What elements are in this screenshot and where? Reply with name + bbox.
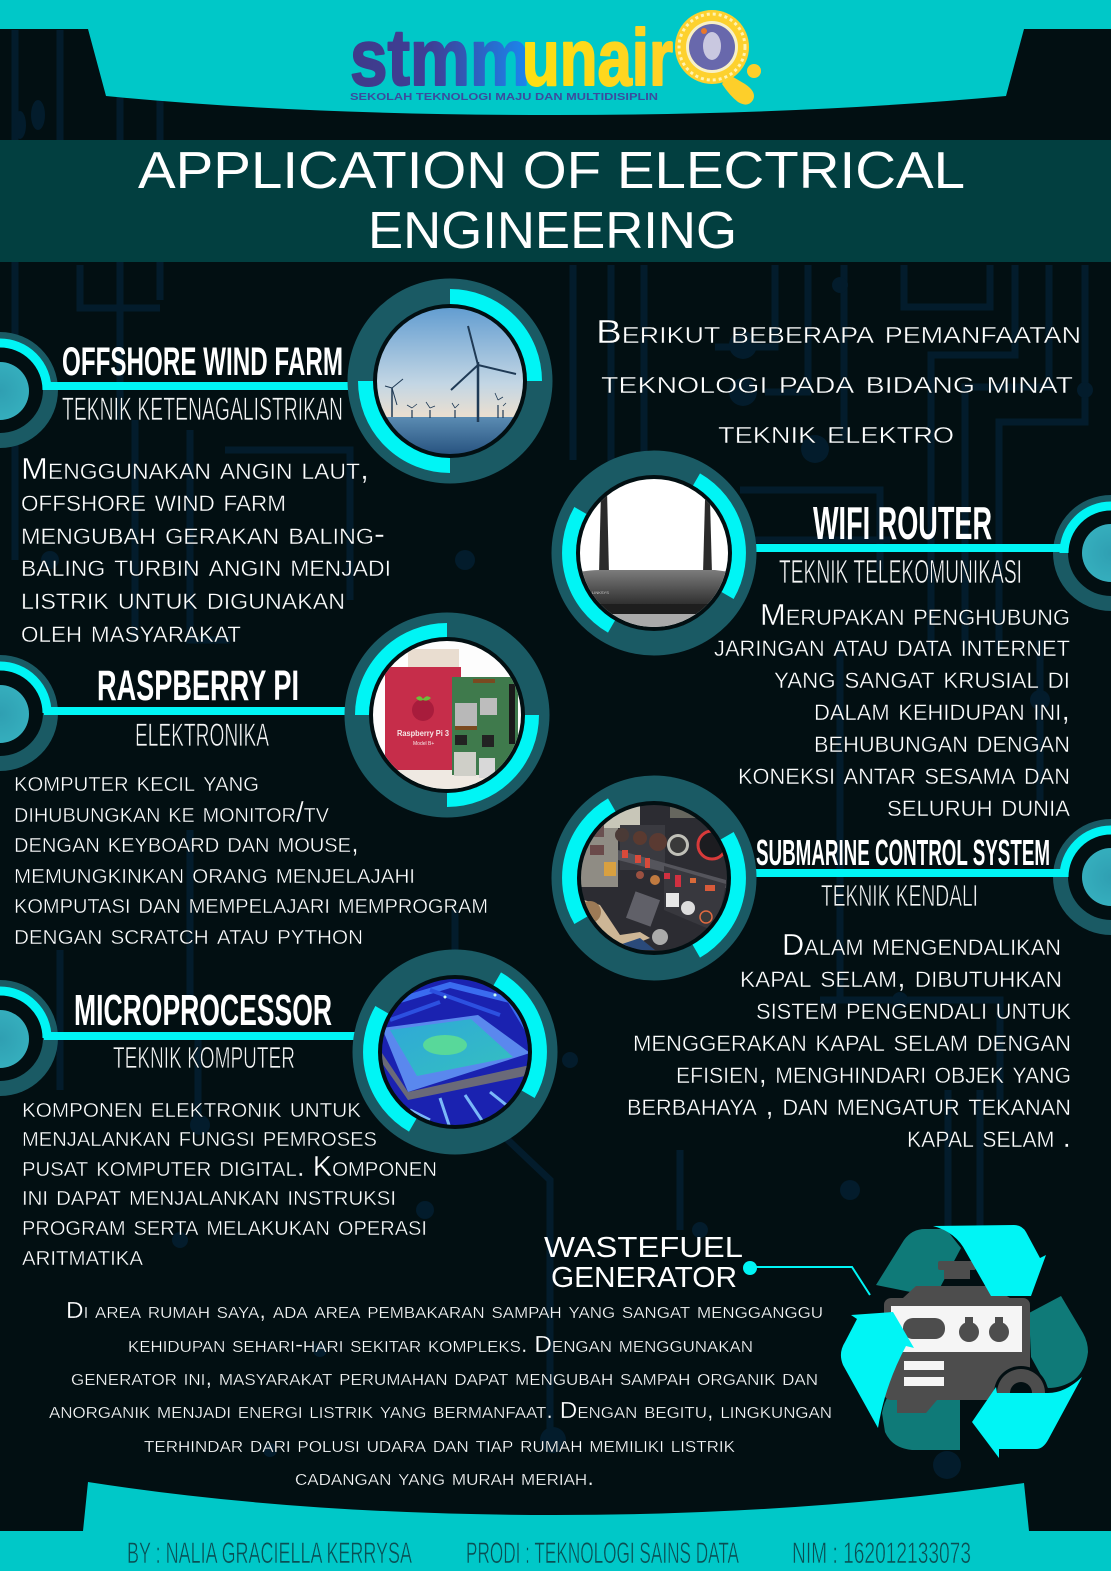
connector node left — [0, 332, 58, 448]
description: dengan scratch atau python — [14, 919, 363, 951]
callout pointer — [743, 1261, 870, 1295]
connector line — [745, 869, 1065, 877]
header banner — [0, 0, 1111, 115]
panel: submarine control system — [552, 776, 1111, 1154]
description: pusat komputer digital. Komponen — [22, 1151, 437, 1183]
heading: WIFI ROUTER — [813, 497, 992, 549]
logo tagline: SEKOLAH TEKNOLOGI MAJU DAN MULTIDISIPLIN — [350, 92, 658, 103]
logo wordmark — [350, 13, 673, 102]
description: listrik untuk digunakan — [21, 581, 345, 616]
panel: raspberry pi — [0, 612, 550, 951]
footer credits — [127, 1537, 971, 1570]
subheading: ELEKTRONIKA — [135, 717, 269, 753]
description: memungkinkan orang menjelajahi — [14, 858, 415, 890]
description: yang sangat krusial di — [774, 660, 1070, 695]
description: efisien, menghindari objek yang — [676, 1055, 1071, 1090]
description: cadangan yang murah meriah. — [295, 1464, 594, 1490]
description: kapal selam . — [907, 1119, 1071, 1154]
description: dihubungkan ke monitor/tv — [14, 797, 330, 829]
description — [14, 766, 488, 951]
title — [138, 142, 965, 260]
description: seluruh dunia — [887, 788, 1070, 823]
description: berbahaya , dan mengatur tekanan — [627, 1087, 1071, 1122]
logo wordmark: unair — [522, 13, 673, 102]
description — [21, 451, 391, 649]
logo seal and magnifier handle — [675, 10, 761, 105]
connector line — [44, 707, 360, 715]
heading: RASPBERRY PI — [97, 662, 299, 710]
description: Merupakan penghubung — [760, 597, 1070, 632]
photo ring: raspberry pi — [344, 612, 550, 818]
description: generator ini, masyarakat perumahan dapat mengubah sampah organik dan — [71, 1364, 818, 1390]
description: program serta melakukan operasi — [22, 1210, 427, 1242]
description: oleh masyarakat — [21, 614, 241, 649]
description: jaringan atau data internet — [714, 628, 1070, 663]
connector node left — [0, 980, 58, 1096]
panel: wastefuel generator — [49, 1225, 1088, 1490]
description: kapal selam, dibutuhkan — [740, 959, 1062, 994]
footer credits: BY : NALIA GRACIELLA KERRYSA — [127, 1537, 412, 1570]
description: komputasi dan mempelajari memprogram — [14, 888, 488, 920]
intro text — [596, 313, 1081, 450]
photo ring: router: LINKSYS — [592, 590, 609, 595]
description: menggerakan kapal selam dengan — [633, 1023, 1071, 1058]
title: APPLICATION OF ELECTRICAL — [138, 142, 965, 200]
subheading: TEKNIK KETENAGALISTRIKAN — [62, 391, 343, 427]
description: sistem pengendali untuk — [756, 991, 1071, 1026]
footer credits: PRODI : TEKNOLOGI SAINS DATA — [466, 1537, 739, 1570]
logo wordmark: stmm — [350, 13, 530, 102]
footer credits: NIM : 162012133073 — [792, 1537, 971, 1570]
description: dalam kehidupan ini, — [814, 692, 1070, 727]
heading — [544, 1232, 743, 1294]
description: menjalankan fungsi pemroses — [22, 1121, 377, 1153]
description — [714, 597, 1070, 823]
heading: OFFSHORE WIND FARM — [62, 340, 343, 384]
photo ring: submarine controls — [552, 776, 756, 980]
description: Dalam mengendalikan — [782, 927, 1061, 962]
description: mengubah gerakan baling- — [21, 516, 385, 551]
description: aritmatika — [22, 1240, 144, 1272]
description: offshore wind farm — [21, 483, 286, 518]
connector node right — [1053, 495, 1111, 611]
connector node right — [1053, 819, 1111, 935]
description — [22, 1092, 437, 1272]
description: komponen elektronik untuk — [22, 1092, 362, 1124]
description — [49, 1297, 832, 1490]
description: komputer kecil yang — [14, 766, 259, 798]
panel: wifi router — [552, 450, 1111, 823]
title band — [0, 140, 1111, 262]
photo ring: wind turbines — [348, 278, 552, 484]
intro text: teknologi pada bidang minat — [601, 363, 1073, 400]
heading: MICROPROCESSOR — [74, 986, 332, 1035]
description: anorganik menjadi energi listrik yang bermanfaat. Dengan begitu, lingkungan — [49, 1397, 832, 1423]
logo: STMM Unair — [350, 10, 761, 105]
description: Di area rumah saya, ada area pembakaran sampah yang sangat mengganggu — [66, 1297, 823, 1323]
description: dengan keyboard dan mouse, — [14, 827, 359, 859]
description: baling turbin angin menjadi — [21, 548, 391, 583]
photo ring: raspberry pi: Model B+ — [413, 741, 434, 747]
description: ini dapat menjalankan instruksi — [22, 1180, 396, 1212]
intro text: Berikut beberapa pemanfaatan — [596, 313, 1081, 350]
description: koneksi antar sesama dan — [738, 756, 1070, 791]
description: Menggunakan angin laut, — [21, 451, 369, 486]
footer banner — [0, 1482, 1111, 1571]
photo ring: raspberry pi: Raspberry Pi 3 — [397, 729, 450, 738]
photo ring: router — [552, 450, 756, 656]
panel: offshore wind farm — [0, 278, 552, 649]
description: terhindar dari polusi udara dan tiap rumah memiliki listrik — [144, 1431, 735, 1457]
connector line — [745, 544, 1065, 552]
connector line — [46, 382, 372, 390]
description — [627, 927, 1071, 1154]
connector node left — [0, 655, 58, 771]
description: kehidupan sehari-hari sekitar kompleks. Dengan menggunakan — [128, 1331, 753, 1357]
photo ring: microprocessor — [352, 950, 558, 1154]
subheading: TEKNIK KENDALI — [821, 878, 978, 913]
panel: microprocessor — [0, 950, 558, 1272]
title: ENGINEERING — [368, 202, 737, 260]
heading: GENERATOR — [551, 1262, 737, 1294]
subheading: TEKNIK KOMPUTER — [113, 1040, 295, 1075]
intro text: teknik elektro — [718, 413, 954, 450]
icon: recycling generator — [841, 1225, 1088, 1458]
connector line — [44, 1032, 372, 1040]
description: behubungan dengan — [814, 724, 1070, 759]
heading: WASTEFUEL — [544, 1232, 743, 1264]
